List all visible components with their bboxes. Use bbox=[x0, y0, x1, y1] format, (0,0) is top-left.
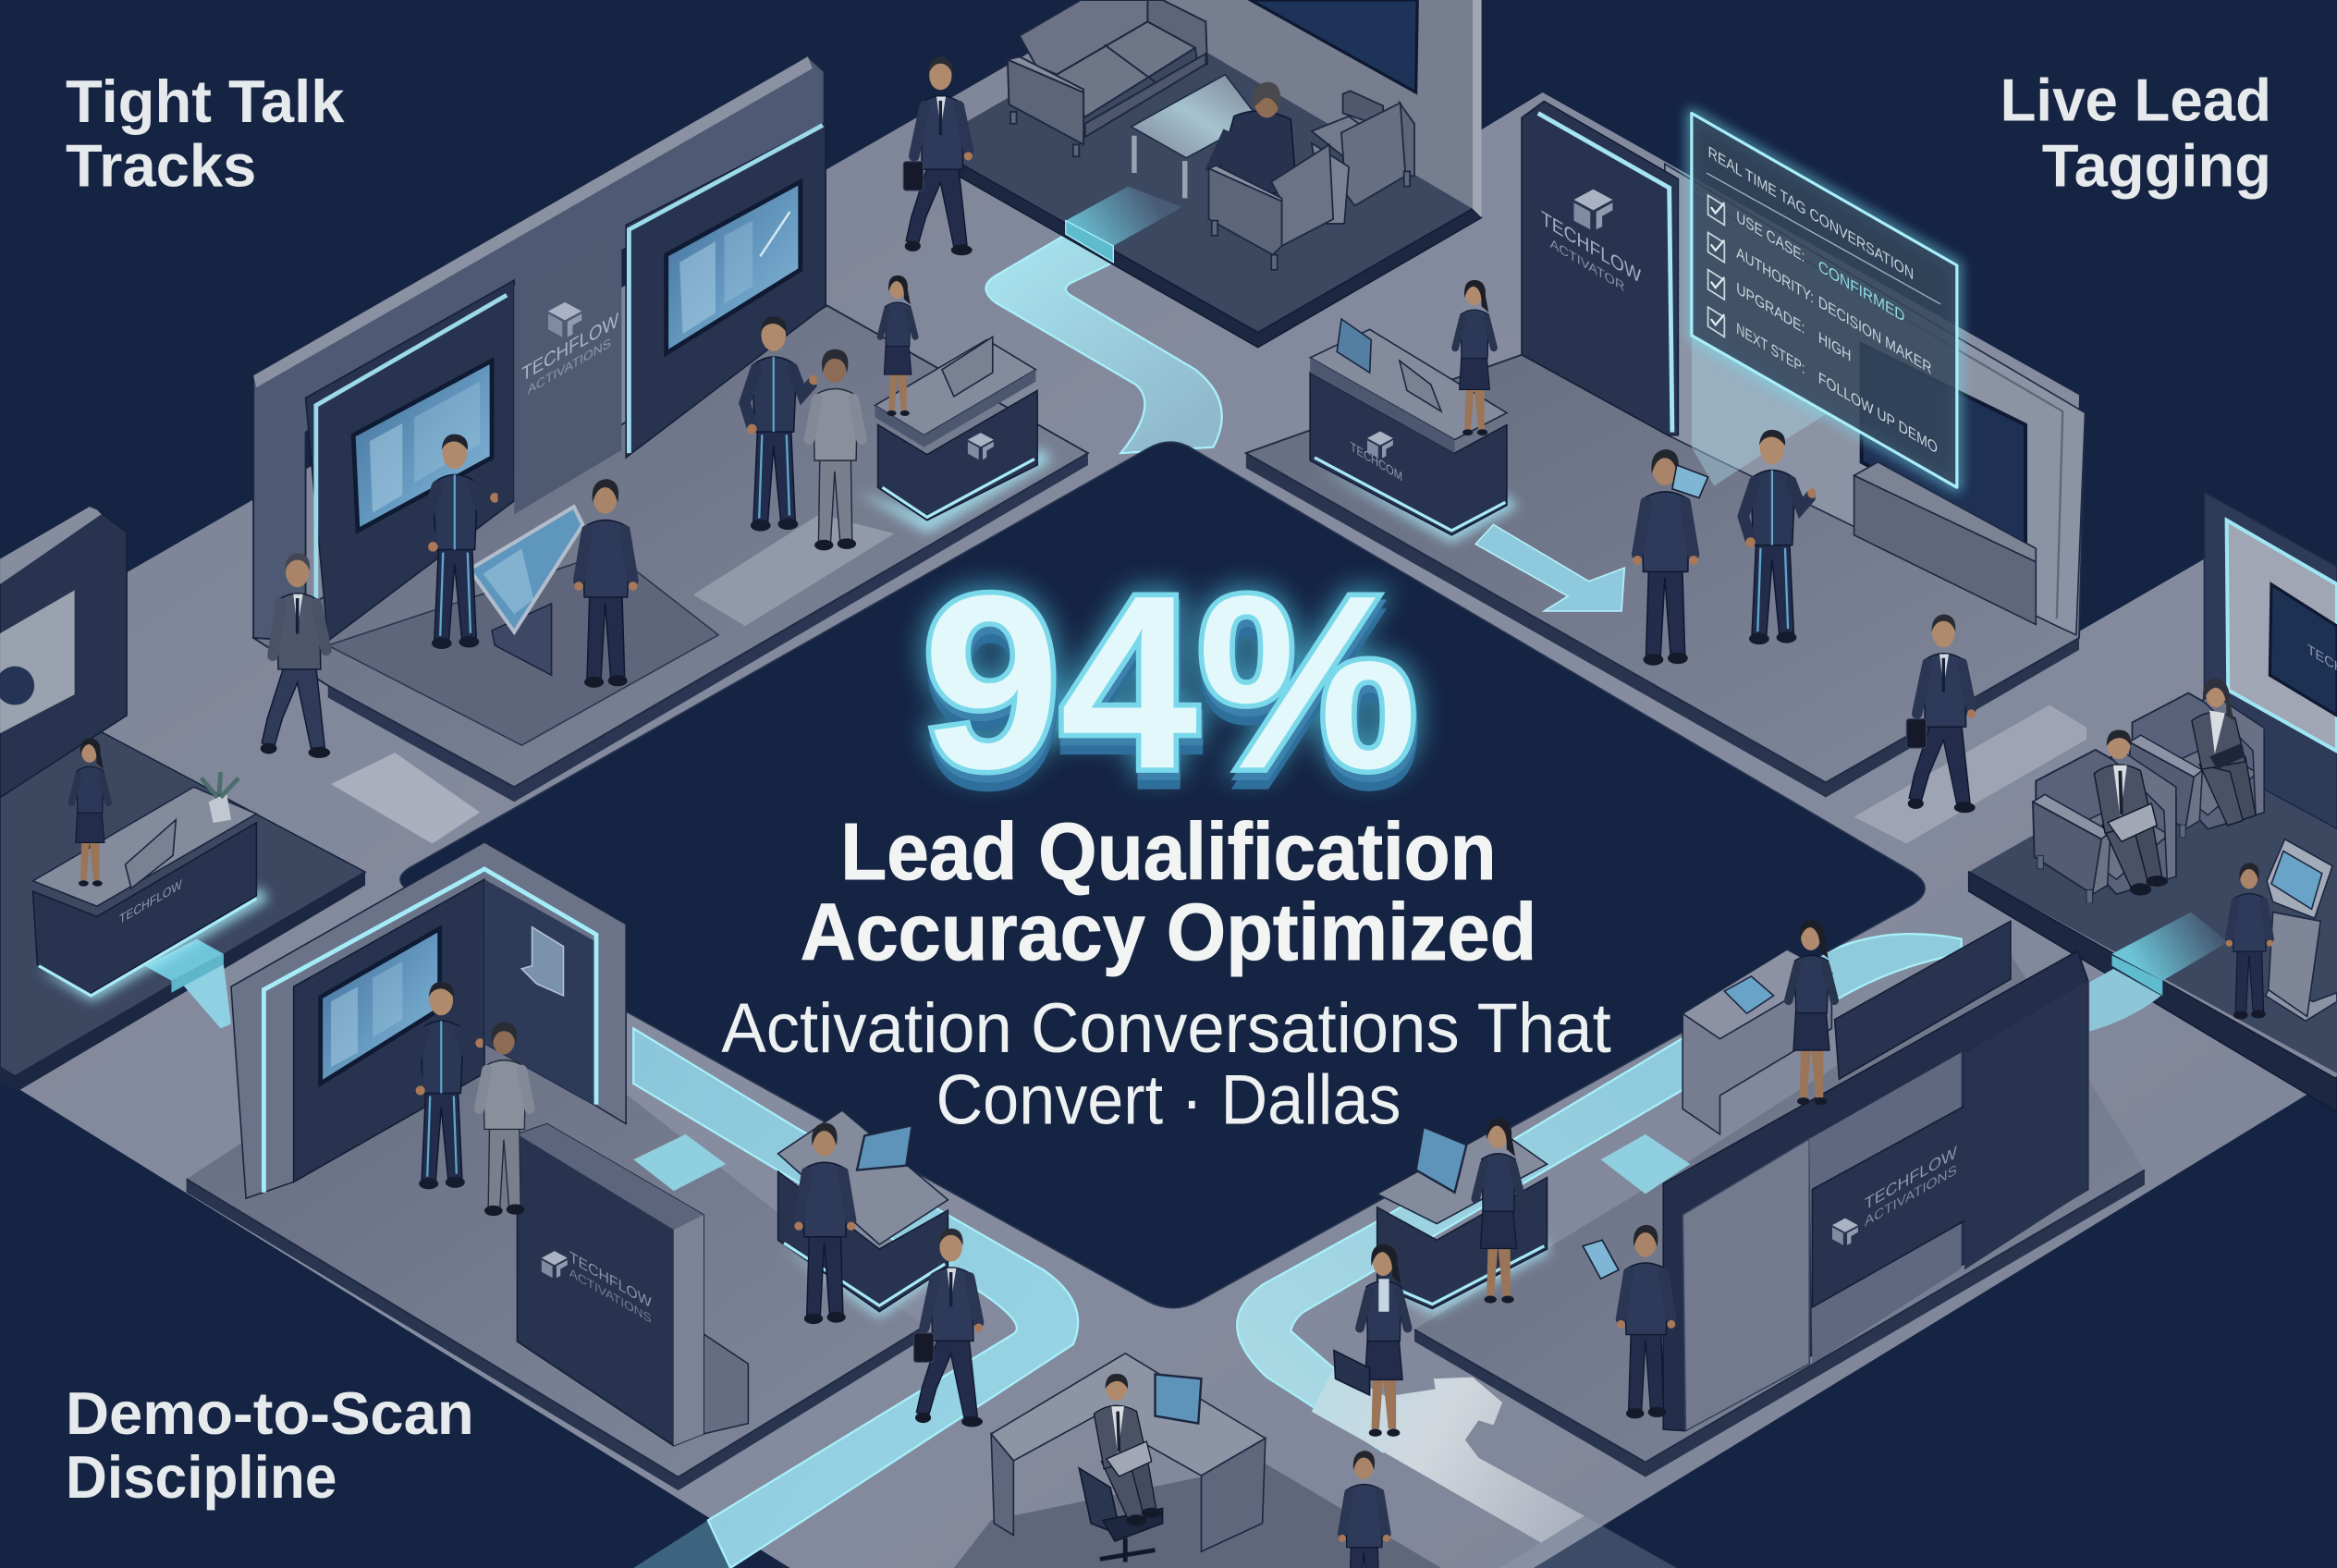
reception counter: northwest bbox=[857, 337, 1051, 533]
counter logo bbox=[968, 433, 994, 459]
armchair right bbox=[1312, 91, 1414, 216]
label: demo-to-scan discipline: Demo-to-Scan bbox=[66, 1380, 474, 1447]
stand logo text: ACTIVATIONS bbox=[569, 1265, 652, 1326]
divider wall bbox=[1835, 921, 2011, 1079]
holo text: FOLLOW UP DEMO bbox=[1818, 368, 1938, 458]
panel: northwest platform bbox=[253, 305, 1088, 802]
west booth logo bbox=[0, 667, 34, 705]
laptop bbox=[942, 337, 993, 397]
touch table kiosk bbox=[470, 507, 582, 675]
self-service kiosk bbox=[2266, 839, 2337, 1021]
holographic tag panel bbox=[1692, 114, 1957, 487]
holo text bbox=[1708, 142, 1938, 458]
person: visitor at touch table bbox=[574, 479, 638, 688]
booth logo text: ACTIVATIONS bbox=[528, 336, 611, 398]
label: tight talk tracks bbox=[66, 68, 345, 200]
panel: southeast long wall bbox=[1663, 951, 2088, 1431]
label: live lead tagging: Live Lead bbox=[2001, 67, 2271, 134]
booth logo text: TECHFLOW bbox=[521, 308, 619, 386]
holo text: AUTHORITY: bbox=[1736, 242, 1814, 307]
pillar logo text: ACTIVATOR bbox=[1550, 237, 1625, 295]
panel: west booth bbox=[0, 507, 127, 798]
stat: 94%: 94% bbox=[924, 551, 1419, 827]
sign logo cube bbox=[1832, 1219, 1858, 1245]
southeast crossing glow bbox=[1601, 1134, 1690, 1194]
briefcase and blouse of walking woman bbox=[1334, 1279, 1389, 1395]
holo text: HIGH bbox=[1818, 327, 1851, 365]
panel: northeast booth wall bbox=[1522, 102, 2085, 635]
panel: east lounge bbox=[1969, 492, 2337, 1112]
panel: west reception platform bbox=[0, 679, 365, 1091]
holo text: UPGRADE: bbox=[1736, 278, 1805, 337]
person: staff at NW counter bbox=[880, 276, 915, 416]
southwest crossing glow bbox=[633, 1134, 726, 1191]
person: man seated at desk bbox=[1094, 1374, 1162, 1525]
right dark panel bbox=[1964, 981, 2088, 1270]
floor path: southwest glow route bbox=[633, 1028, 1078, 1568]
panel: central dark diamond bbox=[400, 442, 1925, 1308]
label: live lead tagging bbox=[2001, 67, 2271, 200]
label: live lead tagging: Tagging bbox=[2042, 133, 2271, 200]
armchair front bbox=[1209, 143, 1349, 270]
top connector glow step bbox=[1066, 187, 1182, 263]
floor path: top glow route bbox=[986, 236, 1222, 453]
lounge platform bbox=[927, 0, 1482, 333]
holo text: USE CASE: bbox=[1736, 207, 1805, 266]
center logo panel bbox=[514, 225, 621, 514]
tv console bbox=[1854, 462, 2036, 624]
floor highlight stripes bbox=[331, 705, 2086, 843]
person: grey walker, west bbox=[261, 553, 330, 758]
glow strip bbox=[263, 869, 596, 1193]
desk floor zone bbox=[954, 1464, 1441, 1568]
person: grey suited visitor, NW bbox=[809, 349, 862, 550]
person: staff at NE counter bbox=[1455, 280, 1494, 435]
person: presenter, SW bbox=[413, 982, 485, 1189]
holo text: CONFIRMED bbox=[1818, 256, 1904, 325]
person: grey visitor, SW bbox=[479, 1023, 530, 1216]
stand logo cube bbox=[542, 1251, 568, 1278]
lounge wall screen bbox=[1251, 0, 1417, 92]
sign logo text: ACTIVATIONS bbox=[1865, 1162, 1957, 1231]
bottom desk with chair bbox=[954, 1354, 1441, 1568]
laptop bbox=[1400, 361, 1441, 411]
person: staff with tablet, NE bbox=[1744, 430, 1817, 644]
corner screen bbox=[321, 928, 440, 1084]
laptop bbox=[1416, 1127, 1466, 1193]
lounge back wall bbox=[1118, 0, 1473, 209]
stat: 94%: 94% bbox=[924, 560, 1419, 837]
long grey wall bbox=[1665, 164, 2085, 635]
person: walking man, SW path bbox=[914, 1229, 983, 1427]
white floor arrow band bbox=[1312, 1368, 1677, 1568]
panel: northeast platform bbox=[1246, 355, 2085, 798]
bottom desk laptop bbox=[1155, 1374, 1201, 1424]
person: staff talking, NW bbox=[745, 316, 819, 532]
label: tight talk tracks: Tight Talk bbox=[66, 68, 345, 135]
label: demo-to-scan discipline bbox=[66, 1380, 474, 1511]
hologram beam bbox=[1692, 336, 1826, 486]
person: man at laptop, SW bbox=[794, 1122, 855, 1324]
person: man at kiosk bbox=[2226, 863, 2273, 1020]
counter logo text: TECHCOM bbox=[1351, 440, 1402, 484]
counter logo cube bbox=[1367, 431, 1393, 458]
person: presenter, NW bbox=[426, 435, 500, 649]
logo cube bbox=[548, 302, 581, 337]
tablet stand bbox=[1337, 319, 1371, 373]
subtitle: activation conversations that convert, Dallas: Activation Conversations That bbox=[721, 989, 1611, 1068]
floor path: southeast glow route bbox=[1237, 934, 1962, 1452]
right wall screen bbox=[667, 182, 801, 353]
glass table bbox=[1132, 75, 1259, 198]
person: reception staff, west bbox=[71, 739, 108, 887]
tall logo pillar bbox=[1522, 102, 1678, 435]
interior mat bbox=[328, 552, 718, 745]
wall document icon bbox=[521, 927, 563, 996]
east connector glow bbox=[2089, 913, 2228, 1032]
reception counter: northeast bbox=[1310, 319, 1517, 543]
panel: southwest corner booth bbox=[231, 842, 626, 1198]
laptop bbox=[125, 820, 176, 888]
office chair bbox=[1079, 1468, 1163, 1562]
stat: 94%: 94% bbox=[923, 544, 1417, 820]
label: tight talk tracks: Tracks bbox=[66, 133, 256, 200]
headline: lead qualification accuracy optimized bbox=[801, 807, 1536, 977]
west connector glow bbox=[144, 939, 231, 1028]
holo text: DECISION MAKER bbox=[1818, 292, 1931, 378]
tv screen bbox=[1862, 344, 2025, 550]
person: walking man with briefcase, top bbox=[903, 57, 973, 255]
corner wall outer bbox=[231, 842, 626, 1198]
center sign bbox=[1812, 1105, 1967, 1307]
left dark panel bbox=[306, 280, 514, 641]
east lounge wall bbox=[2204, 492, 2337, 828]
light patch on platform bbox=[693, 514, 894, 626]
laptop bbox=[857, 1125, 912, 1170]
southwest stand panel bbox=[517, 1124, 748, 1446]
pillar logo cube bbox=[1574, 190, 1612, 229]
person: woman at laptop, SE bbox=[1475, 1118, 1522, 1304]
northeast floor arrow bbox=[1475, 524, 1624, 611]
person: man with tablet, SE bbox=[1617, 1225, 1675, 1418]
corner wall right face bbox=[484, 879, 596, 1106]
person tablet NE bbox=[1672, 465, 1708, 497]
sign logo text: TECHFLOW bbox=[1865, 1144, 1957, 1215]
reception counter: southeast bbox=[1377, 1127, 1550, 1315]
left wall screen bbox=[353, 361, 492, 531]
subtitle: activation conversations that convert, Dallas bbox=[721, 989, 1611, 1140]
west booth light panel bbox=[0, 590, 75, 733]
sofa bbox=[1008, 0, 1207, 156]
corner wall left face bbox=[294, 879, 484, 1182]
person: walking man, east bbox=[1906, 615, 1976, 813]
center grey panel bbox=[1809, 1052, 1962, 1364]
east lounge platform bbox=[1969, 738, 2337, 1073]
outer back plate bbox=[253, 56, 825, 641]
right dark panel bbox=[626, 122, 826, 458]
seated man at table bbox=[1215, 82, 1297, 194]
tablet of SE man bbox=[1583, 1240, 1619, 1279]
stand logo text: TECHFLOW bbox=[569, 1247, 652, 1312]
seated man bbox=[2094, 729, 2168, 896]
seated woman bbox=[2192, 679, 2256, 826]
panel: southeast platform bbox=[1414, 954, 2145, 1477]
west counter logo text: TECHFLOW bbox=[119, 877, 182, 927]
holo text: NEXT STEP: bbox=[1736, 319, 1805, 377]
panel: northwest booth wall bbox=[253, 56, 826, 643]
left grey panel bbox=[1682, 1139, 1809, 1431]
holo checkboxes bbox=[1708, 195, 1724, 337]
panel: top lounge booth bbox=[927, 0, 1482, 348]
person: visitor with tablet, NE bbox=[1633, 449, 1698, 666]
person: woman walking with briefcase bbox=[1360, 1244, 1408, 1437]
holo text: REAL TIME TAG CONVERSATION bbox=[1708, 142, 1914, 284]
person: woman at gate counter bbox=[1789, 920, 1834, 1105]
demo counter: southwest bbox=[778, 1110, 954, 1317]
reception counter: west bbox=[33, 772, 268, 1001]
glow strips bbox=[316, 125, 823, 643]
label: demo-to-scan discipline: Discipline bbox=[66, 1444, 336, 1511]
subtitle: activation conversations that convert, Dallas: Convert · Dallas bbox=[936, 1061, 1401, 1140]
panel: southwest platform bbox=[187, 984, 924, 1490]
armchair back bbox=[2129, 693, 2264, 838]
stat: 94%: 94% bbox=[923, 544, 1417, 820]
counter tablet bbox=[1724, 976, 1774, 1013]
headline: lead qualification accuracy optimized: Lead Qualification bbox=[840, 807, 1497, 897]
east lounge screen bbox=[2270, 584, 2337, 716]
potted plant bbox=[202, 772, 239, 823]
person: man walking, bottom bbox=[1339, 1451, 1390, 1568]
service gate counter bbox=[1682, 949, 1831, 1134]
pillar logo text: TECHFLOW bbox=[1541, 205, 1641, 288]
headline: lead qualification accuracy optimized: Accuracy Optimized bbox=[801, 888, 1536, 977]
armchair front bbox=[2033, 750, 2176, 903]
